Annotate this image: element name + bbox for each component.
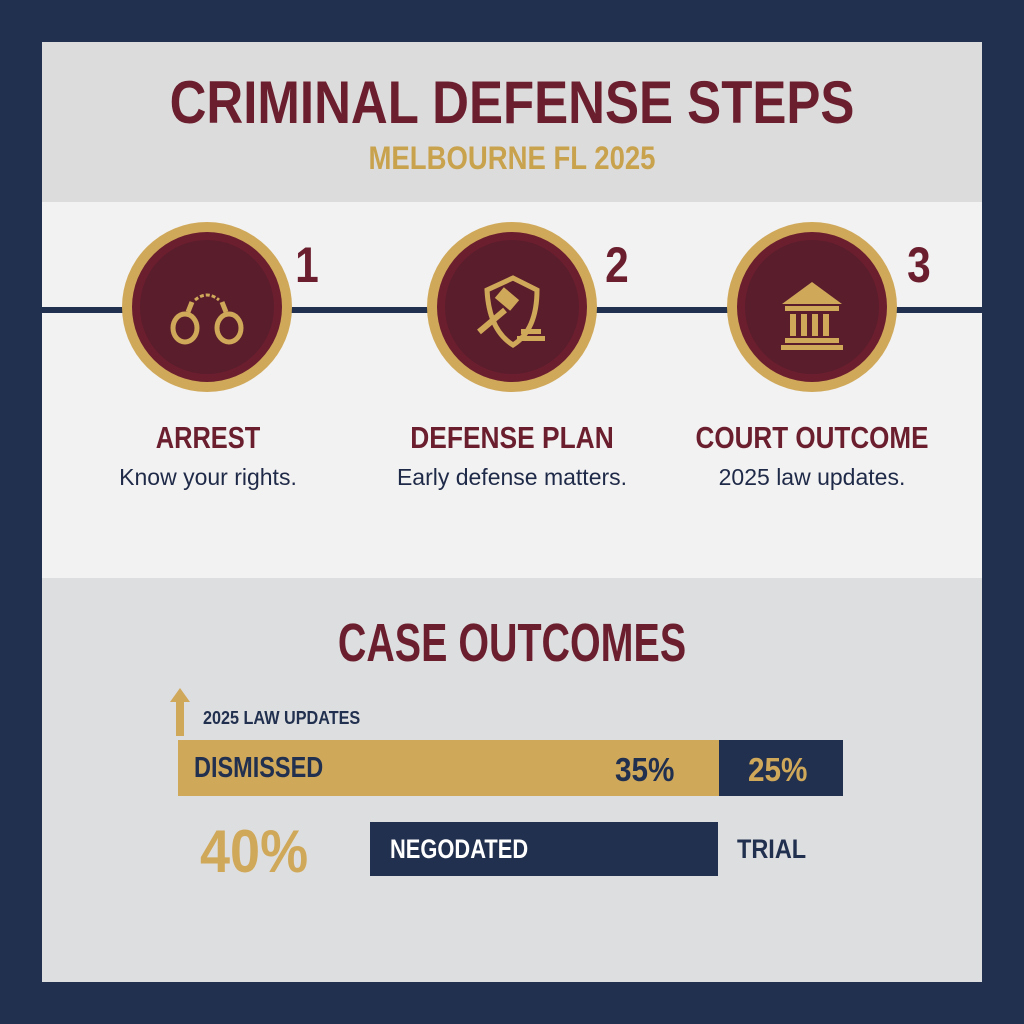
- description: 2025 law updates.: [719, 464, 905, 490]
- subtitle: MELBOURNE FL 2025: [369, 140, 655, 176]
- description: Know your rights.: [119, 464, 297, 490]
- label: DEFENSE PLAN: [410, 420, 614, 455]
- bar: trial: 25%: [748, 751, 807, 788]
- bar: dismissed: [178, 740, 719, 796]
- label: COURT OUTCOME: [696, 420, 928, 455]
- heading: case outcomes: CASE OUTCOMES: [338, 613, 686, 673]
- bar: dismissed: DISMISSED: [194, 752, 323, 784]
- step 1: arrest: [119, 222, 319, 490]
- number 3: 3: [907, 237, 931, 293]
- legend text: 2025 LAW UPDATES: [203, 708, 360, 728]
- bar: negotiated: [370, 822, 718, 876]
- icon: handcuffs: [122, 222, 292, 392]
- number 1: 1: [295, 237, 319, 293]
- icon: courthouse: [727, 222, 897, 392]
- step 2: defense plan: [397, 222, 629, 490]
- header band: [42, 42, 982, 202]
- stat: 40%: 40%: [200, 818, 308, 885]
- title: CRIMINAL DEFENSE STEPS: [170, 69, 854, 136]
- timeline line: [42, 307, 982, 313]
- icon: up arrow: [170, 688, 190, 736]
- number 2: 2: [605, 237, 629, 293]
- label: ARREST: [156, 420, 260, 455]
- label: trial: TRIAL: [737, 834, 806, 864]
- bar: negotiated: NEGODATED: [390, 834, 528, 864]
- steps band: [42, 202, 982, 578]
- bar: dismissed: 35%: [615, 751, 674, 788]
- icon: shield gavel: [427, 222, 597, 392]
- description: Early defense matters.: [397, 464, 627, 490]
- step 3: court outcome: [696, 222, 931, 490]
- bar: trial: [719, 740, 843, 796]
- chart: outcomes bars: [170, 688, 843, 885]
